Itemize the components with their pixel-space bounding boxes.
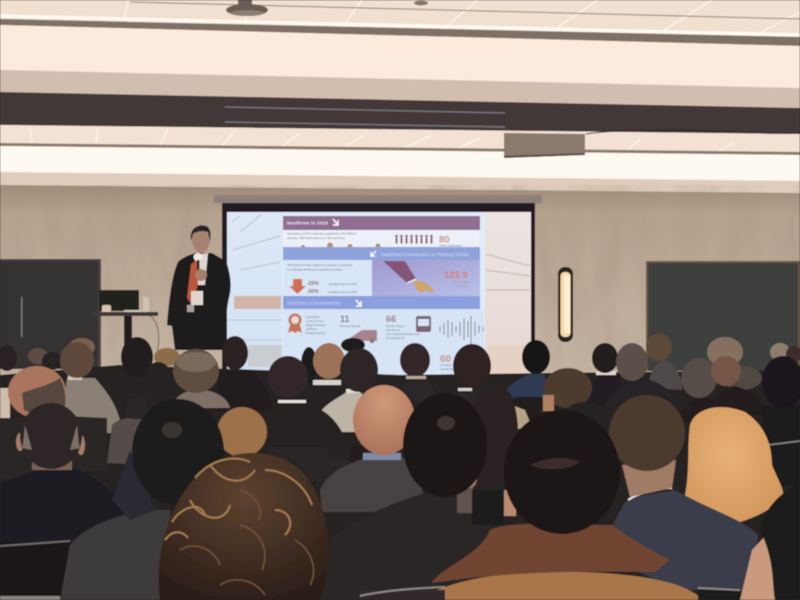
- chair by bald man: [350, 445, 364, 469]
- slide section: commercial car parking: -50%: [307, 289, 319, 295]
- slide section: Heathrow 2.0 sustainability: Electric Plug-in: [386, 324, 405, 328]
- slide section: Heathrow 2.0 sustainability: Heathrow 2.0 Sustainability: [287, 300, 341, 306]
- person: balding man right of woman: [535, 368, 600, 430]
- slide background photo right: [484, 212, 533, 388]
- person: dark jacket with white collar: [590, 343, 622, 410]
- slide section: commercial car parking: million GBP in: [452, 280, 471, 284]
- person: man with dark sweater left: [0, 403, 129, 546]
- person: far right dark: [762, 356, 800, 485]
- slide section: Heathrow 2.0 sustainability: London Living: [306, 319, 324, 323]
- left door: [0, 259, 101, 369]
- slide section: commercial car parking: -25%: [307, 281, 319, 287]
- slide section: Heathrow 2.0 sustainability: (2048 for: [306, 327, 317, 331]
- slide section: Heathrow 2.0 sustainability: of waste: [440, 363, 452, 367]
- wall texture: [0, 185, 800, 380]
- person: dark head back row: [108, 337, 153, 412]
- person: navy jacket: [500, 340, 550, 398]
- person: man by screen center: [447, 344, 497, 420]
- icon: red down arrow: [289, 279, 306, 294]
- person: curly hair woman: [159, 453, 328, 600]
- icon: rosette badge: [288, 314, 302, 333]
- person: plaid shirt edge: [0, 388, 10, 418]
- person: right dark jacket: [317, 493, 497, 600]
- icon: delivery van: [350, 330, 377, 341]
- icon: bus: [416, 316, 431, 332]
- person: grey haired man right: [680, 358, 717, 422]
- audience background: [0, 365, 800, 600]
- person: woman long dark hair: [472, 387, 518, 490]
- person: man navy jacket: [609, 395, 758, 590]
- slide section: Heathrow 2.0 sustainability: 60: [440, 354, 452, 365]
- person: bald man: [303, 343, 346, 412]
- slide section: Heathrow 2.0 sustainability: Mentors (Guest): [340, 324, 360, 328]
- slide section: commercial car parking: colleague trips by 2030: [328, 282, 357, 286]
- icon: row of passengers: [395, 235, 433, 244]
- slide section: commercial car parking: 125.9: [444, 270, 468, 281]
- slide section: commercial car parking: [283, 247, 480, 296]
- audience: front rows: [0, 393, 800, 600]
- person: dark head man centre: [403, 393, 487, 513]
- person: grey haired man: [603, 343, 678, 410]
- presenter: [167, 225, 231, 350]
- person: big dark-haired man: [60, 399, 224, 600]
- slide section: Heathrow 2.0 sustainability: [283, 296, 484, 388]
- person: grey haired balding man: [707, 337, 762, 390]
- person: balding man by screen: [400, 343, 436, 402]
- icon: heads cut off by overlay: [301, 242, 380, 249]
- slide section: Heathrow in 2019: Operating at 97% capacity, supporting >80 Airlines,: [287, 232, 357, 236]
- slide section: Heathrow in 2019: serving >200 destinations in >80 countries: [287, 236, 345, 240]
- chairs bottom centre: [360, 587, 740, 600]
- person: dark-haired man middle: [125, 362, 173, 420]
- audience: back rows: [0, 333, 800, 485]
- slide section: Heathrow 2.0 sustainability: Bus fleet in: [386, 328, 400, 332]
- projection screen: [214, 195, 542, 388]
- slide section: Heathrow 2.0 sustainability: next Contract Delivery from: [386, 332, 421, 336]
- person: grey jacket middle: [107, 418, 145, 465]
- person: dark head behind large man: [560, 402, 610, 442]
- slide section: commercial car parking: The National Policy Statement requires a reduction: [287, 263, 353, 267]
- lectern table with monitor: [92, 290, 159, 378]
- slide section: commercial car parking: in Colleague Parking along Early commuter: [287, 268, 343, 272]
- person: man in dark jacket center: [250, 356, 353, 463]
- wall: [0, 185, 800, 380]
- slide section: Heathrow 2.0 sustainability: Wage Employer: [306, 323, 326, 327]
- slide panel: [282, 214, 485, 388]
- slide section: Heathrow in 2019: [283, 216, 480, 249]
- slide section: Heathrow 2.0 sustainability: Oct-20 May-21: [386, 336, 405, 340]
- slide section: Heathrow in 2019: 80: [439, 234, 450, 246]
- person: grey haired man middle: [172, 349, 230, 408]
- slide section: Heathrow 2.0 sustainability: should be: [440, 367, 453, 371]
- person: tall man far right: [646, 333, 682, 390]
- slide section: commercial car parking: revenue: [456, 284, 467, 288]
- slide section: Heathrow 2.0 sustainability: 66: [386, 314, 396, 324]
- slide background photo right: Heathrow: [496, 378, 533, 387]
- chair by woman: [513, 397, 543, 420]
- person: man in dark jacket near screen: [218, 336, 273, 412]
- person: glasses man: [315, 348, 378, 432]
- person: woman dark hair behind: [301, 347, 317, 383]
- ceiling duct box: [504, 130, 800, 158]
- ceiling projector: [226, 0, 428, 16]
- person: bald man centre: [320, 385, 425, 512]
- audience: middle rows: [0, 348, 800, 546]
- slide section: Heathrow in 2019: million passengers: [439, 244, 463, 248]
- person: bald man left: [0, 366, 107, 480]
- icon: sound wave: [440, 316, 483, 345]
- slide section: commercial car parking: Heathrow Commercial Car Parking (2018): [381, 252, 469, 257]
- person: grey head far right: [770, 343, 790, 361]
- person: hoodie man: [418, 410, 703, 600]
- chair centre: [472, 490, 504, 525]
- person: grey jacket: [60, 342, 122, 433]
- person: dark jacket right: [711, 356, 768, 415]
- slide section: Heathrow 2.0 sustainability: Accredited: [306, 315, 320, 319]
- icon: car key: [383, 261, 416, 283]
- ceiling: [0, 0, 800, 200]
- person: bottom right foreground: [740, 483, 800, 600]
- person: blonde woman: [685, 407, 783, 526]
- right dark board: [646, 261, 800, 371]
- person: blonde hair back row: [154, 348, 180, 366]
- chair bottom left: [0, 541, 70, 600]
- slide section: Heathrow 2.0 sustainability: 11: [340, 314, 350, 324]
- slide background photo left: [227, 212, 283, 388]
- person: tan shirt: [512, 405, 532, 430]
- chairs centre: [268, 447, 348, 481]
- slide section: Heathrow in 2019: Heathrow in 2019: [287, 220, 328, 226]
- slide section: commercial car parking: colleague trips by 2040: [328, 290, 357, 294]
- wall sconce: [558, 267, 573, 342]
- person: ginger hair: [217, 407, 267, 457]
- slide section: Heathrow 2.0 sustainability: Parking Teams): [306, 331, 325, 335]
- chair right of blonde: [768, 440, 800, 486]
